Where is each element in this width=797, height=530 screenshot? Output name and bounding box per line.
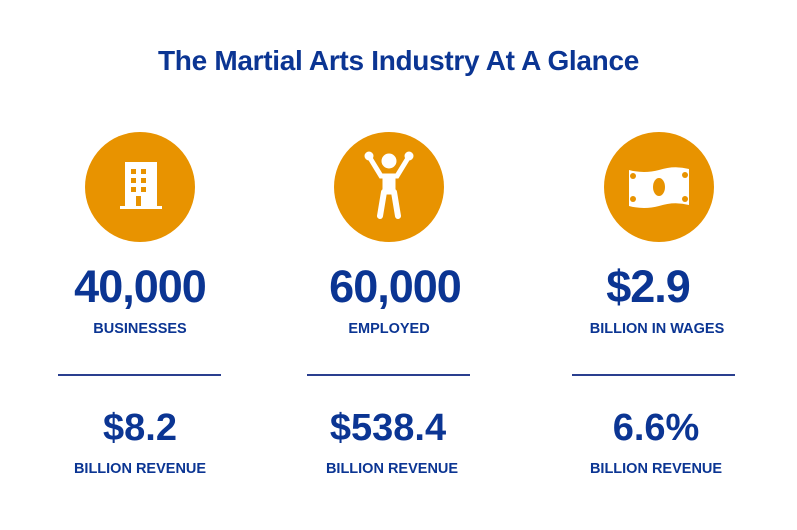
label: revenue 3: BILLION REVENUE — [590, 461, 722, 477]
title: The Martial Arts Industry At A Glance — [158, 45, 639, 76]
icon: money — [604, 132, 714, 242]
icon: person — [334, 132, 444, 242]
stat: revenue 2: $538.4 — [330, 407, 446, 449]
stat: wages: $2.9 — [606, 261, 690, 312]
stat: businesses: 40,000 — [74, 261, 206, 312]
stat: employed: 60,000 — [329, 261, 461, 312]
icon: building — [85, 132, 195, 242]
label: revenue 2: BILLION REVENUE — [326, 461, 458, 477]
label: employed: EMPLOYED — [348, 321, 430, 337]
label: revenue 1: BILLION REVENUE — [74, 461, 206, 477]
label: wages: BILLION IN WAGES — [590, 321, 724, 337]
stat: revenue 3: 6.6% — [613, 407, 699, 449]
label: businesses: BUSINESSES — [93, 321, 187, 337]
stat: revenue 1: $8.2 — [103, 407, 177, 449]
